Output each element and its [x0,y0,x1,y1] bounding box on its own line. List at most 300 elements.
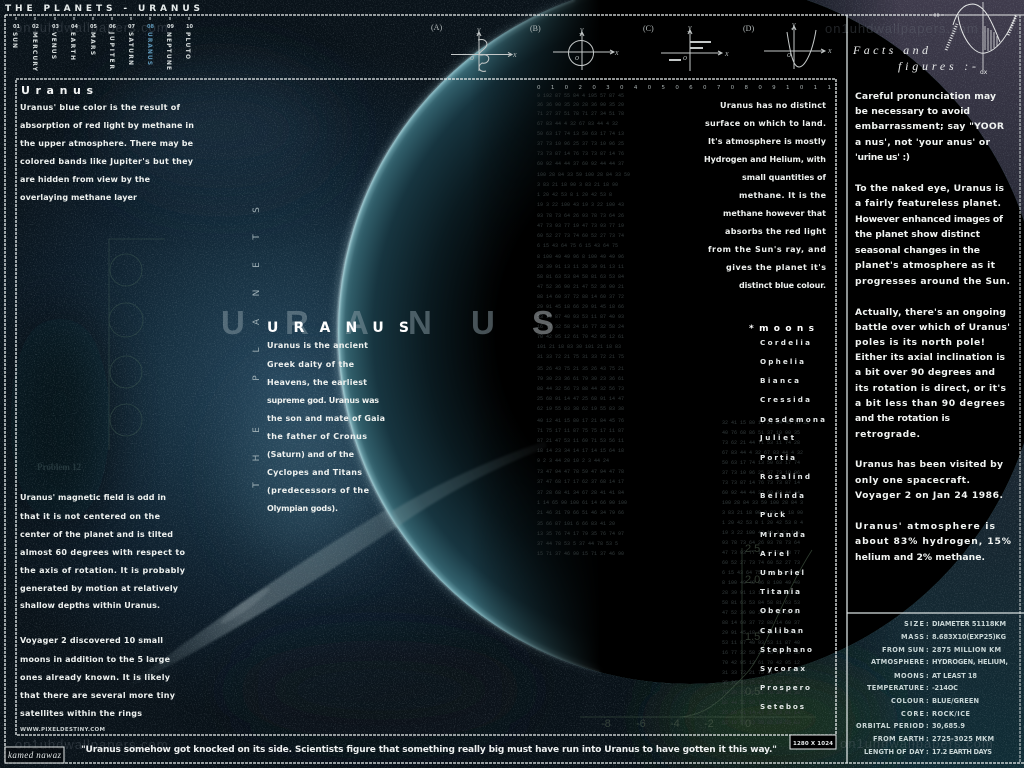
heading: Uranus: Uranus [21,84,93,97]
left text: blue colour: colored bands like Jupiter's but they [20,157,194,166]
facts text: naked eye: planet's atmosphere as it [855,260,996,271]
center heading: Uranus: URANUS [267,320,409,336]
number grid: 93 78 73 64 26 93 78 73 64 26 [537,213,624,219]
website credit: WWW.PIXELDESTINY.COM [20,727,105,733]
planet navigation: MARS [89,32,95,55]
planet navigation: 01 [13,24,20,30]
number grid: 16 77 32 58 24 16 77 32 58 24 [537,324,624,330]
number grid: 73 62 21 44 71 53 11 74 28 [722,440,800,446]
left text: blue colour: absorption of red light by methane in [20,121,194,130]
vertical heading: the planets: S [252,207,262,213]
facts text: naked eye [855,183,1010,287]
number grid: 87 21 47 53 11 60 71 53 56 11 [537,438,624,444]
number grid: 37 73 10 96 25 37 73 10 96 [722,470,800,476]
planet statistics table: ROCK/ICE [932,710,970,718]
planet statistics table: -214OC [932,684,958,692]
facts text: north pole: a bit over 90 degrees and [855,367,995,378]
facts text: north pole: and the rotation is [855,413,951,424]
planet statistics table: 2725-3025 MKM [932,735,994,743]
number grid: 70 42 95 12 61 70 42 95 12 61 [537,334,624,340]
vertical heading: the planets [252,207,262,489]
facts text: naked eye: To the naked eye, Uranus is [855,183,1005,194]
planet statistics table: : [926,684,929,692]
left text: moons discovered [20,636,176,718]
moons list: Juliet [759,433,795,442]
number grid: 71 75 17 11 87 75 75 17 11 87 [537,428,624,434]
moons heading: *moons [749,324,814,334]
facts text: pronunciation: a nus', not 'your anus' or [855,137,990,148]
center text: Greek deity: the son and mate of Gaia [267,414,385,423]
math figures A to D: y [791,20,796,29]
planet navigation: 10 [186,24,193,30]
big ghost heading: U [471,304,495,341]
center text: Greek deity: (Saturn) and of the [267,450,355,459]
facts and figures heading: figures :- [898,59,976,73]
number grid: 88 14 60 37 72 88 14 60 37 72 [537,294,624,300]
number grid: 35 26 43 75 21 35 26 43 75 [722,680,800,686]
facts text: north pole: its rotation is direct, or it's [855,383,1007,394]
moons list: Belinda [760,491,804,500]
big ghost heading: A [345,304,369,341]
faint bottom graph: -2 [704,718,714,730]
watermarks: on1uhdwallpapers.com [840,736,994,751]
number grid: 101 21 18 83 30 101 21 18 83 [537,344,621,350]
number grid: 79 30 23 36 61 79 30 23 36 [722,690,800,696]
math figures A to D: y [579,25,584,34]
vertical heading: the planets: P [252,375,262,381]
number grid: 100 28 84 33 59 100 28 84 3 [722,500,803,506]
number grid: 58 81 63 53 84 58 81 63 53 [722,600,800,606]
watermarks: on1uhdwallpapers.com [15,20,169,35]
planet navigation: 09 [167,24,174,30]
planet statistics table: 30,685.9 [932,722,965,730]
number grid: 1 20 42 53 8 1 20 42 53 8 [537,192,612,198]
right column text: atmosphere: small quantities of [742,173,827,182]
number grid: 88 44 32 56 73 88 44 32 56 [722,700,800,706]
planet navigation: 02 [32,24,39,30]
facts text: north pole: Actually, there's an ongoing [855,307,1006,318]
facts text: Voyager visit [855,459,1003,501]
title: THE PLANETS - URANUS [5,4,200,14]
left text: moons discovered: ones already known. It is likely [20,673,171,682]
left text: magnetic field: Uranus' magnetic field is odd in [20,493,166,502]
watermarks: on1uhdwallpapers.com [15,737,169,752]
number grid: 50 63 17 74 13 50 63 17 74 13 [537,131,624,137]
left text: moons discovered: Voyager 2 discovered 10 small [20,636,163,645]
vertical heading: the planets: H [252,455,262,461]
planet statistics table: : [926,646,929,654]
planet statistics table: FROM SUN [882,646,924,654]
vertical heading: the planets: L [252,347,262,353]
number grid: 9 2 3 44 20 10 2 3 44 24 [537,458,609,464]
number grid: 19 3 22 100 43 19 3 22 100 43 [537,202,624,208]
facts text: Voyager visit: Uranus has been visited by [855,459,1003,470]
number grid: 31 33 72 21 75 31 33 72 21 [722,670,800,676]
number grid: 35 26 43 75 21 35 26 43 75 21 [537,366,624,372]
moons list: Titania [760,587,800,596]
facts text: atmosphere composition: Uranus' atmosphere is [855,521,996,532]
planet navigation: URANUS [146,32,152,65]
number grid: 67 83 44 4 32 67 83 44 4 32 [722,450,803,456]
number grid: 37 47 68 17 17 62 37 68 14 17 [537,479,624,485]
number grid: 40 12 41 15 80 17 21 84 45 76 [537,418,624,424]
faint bottom graph: 0.5 [745,686,760,698]
facts text: naked eye: a fairly featureless planet. [855,198,1001,209]
left text: magnetic field: that it is not centered on the [20,512,161,521]
number grid: 6 15 43 64 75 6 15 43 64 75 [722,570,803,576]
facts text: pronunciation: Careful pronunciation may [855,91,996,102]
number grid: 29 91 45 18 66 29 91 45 18 [722,630,800,636]
planet statistics table: COLOUR [891,697,924,705]
math figures A to D: (B) [530,24,541,33]
number grid: 6 15 43 64 75 6 15 43 64 75 [537,243,618,249]
planet statistics table: DIAMETER 51118KM [932,620,1006,628]
number grid header: 0 1 0 2 0 3 0 4 0 5 0 6 0 7 0 8 0 9 1 0 1 1 [537,85,831,91]
vertical heading: the planets: T [252,234,262,241]
number grid: 47 73 93 77 19 47 73 93 77 19 [537,223,624,229]
planet statistics table: 2875 MILLION KM [932,646,1001,654]
facts text: pronunciation: embarrassment; say "YOOR [855,121,1004,132]
number grid: 37 28 68 41 34 67 28 41 41 84 [537,490,624,496]
vertical heading: the planets: T [252,482,262,489]
number grid: 21 46 31 79 66 51 46 34 79 66 [537,510,624,516]
resolution box [790,735,836,749]
moons list [759,338,825,711]
number grid: 36 36 90 35 20 28 36 90 35 20 [537,102,624,108]
facts text: north pole: poles is its north pole! [855,337,985,348]
math figures A to D: y [687,23,692,32]
number grid: 60 52 27 73 74 60 52 27 73 74 [537,233,624,239]
moons list: Stephano [760,645,812,654]
right column text: atmosphere: methane however that [723,209,826,218]
facts text: atmosphere composition: helium and 2% methane. [855,552,985,563]
signature box: kamed nawaz [8,750,61,760]
number grid: 79 30 23 36 61 79 30 23 36 61 [537,376,624,382]
planet statistics table: : [926,672,929,680]
facts text: north pole: retrograde. [855,429,920,440]
planet navigation: SATURN [127,32,133,65]
planet navigation: 08 [147,24,154,30]
planet statistics table: SIZE [904,620,924,628]
center text: Greek deity: Olympian gods). [267,504,338,513]
center text: Greek deity: the father of Cronus [267,432,367,441]
planet navigation: 04 [71,24,78,30]
planet navigation: SUN [11,32,17,48]
faint bottom graph: 0 [745,718,751,730]
number grid: 8 100 49 49 96 8 100 49 49 [722,580,800,586]
math figures A to D: o [470,53,474,62]
facts text: pronunciation: be necessary to avoid [855,106,970,117]
math figures A to D: (D) [743,24,754,33]
planet navigation: JUPITER [108,31,114,70]
left text: magnetic field: generated by motion at relatively [20,584,179,593]
planet navigation: MERCURY [31,32,37,72]
planet statistics table: : [926,735,929,743]
planet statistics table: MOONS [894,672,924,680]
number grid: 47 52 36 90 21 47 52 36 90 [722,610,800,616]
number grid: 50 63 17 74 13 50 63 17 74 [722,460,800,466]
planet statistics table: ATMOSPHERE [871,658,924,666]
planet statistics table: : [926,748,929,756]
right column text: atmosphere: methane. It is the [739,191,827,200]
number grid: 1 14 65 90 100 61 14 66 90 100 [537,500,627,506]
planet statistics table: : [926,697,929,705]
number grid: 28 39 91 13 11 28 39 91 13 [722,590,800,596]
left text: blue colour: the upper atmosphere. There may be [20,139,194,148]
center text: Greek deity: (predecessors of the [267,486,370,495]
number grid: 60 52 27 73 74 60 52 27 73 [722,560,800,566]
center text: Greek deity: Heavens, the earliest [267,378,367,387]
vertical heading: the planets: A [252,318,262,325]
left text: blue colour [20,103,194,202]
number grid: 60 92 44 44 37 60 92 44 44 [722,490,800,496]
moons list: Bianca [760,376,799,385]
facts text: atmosphere composition: about 83% hydrogen, 15% [855,536,1011,547]
planet statistics table: HYDROGEN, HELIUM, [932,658,1008,666]
left text: magnetic field [20,493,186,610]
facts text: north pole: a bit less than 90 degrees [855,398,1006,409]
right column text: atmosphere: Uranus has no distinct [720,101,826,110]
left text: magnetic field: center of the planet and is tilted [20,530,173,539]
planet navigation [11,17,193,72]
number grid: 25 68 91 14 47 25 68 91 14 47 [537,396,624,402]
math figures A to D: x [724,49,729,58]
planet Uranus [338,0,1024,700]
planet statistics table: FROM EARTH [873,735,924,743]
planet statistics table: : [926,633,929,641]
planet navigation: EARTH [69,32,75,60]
planet navigation: 06 [109,24,116,30]
moons list: Puck [760,510,785,519]
math figures A to D: o [575,53,579,62]
math figures A to D: (C) [643,24,654,33]
moons list: Cordelia [760,338,810,347]
planet navigation: 03 [52,24,59,30]
center text: Greek deity: Greek daity of the [267,360,355,369]
left text: moons discovered: that there are several more tiny [20,691,176,700]
number grid: 62 19 55 83 38 62 19 55 83 38 [537,406,624,412]
planet statistics table: CORE [901,710,924,718]
faint bottom graph: -4 [670,718,680,730]
number grid: 73 73 87 14 76 73 73 87 14 76 [537,151,624,157]
facts text: atmosphere composition [855,521,1011,563]
number grid: 37 44 78 53 5 37 44 78 53 5 [537,541,618,547]
moons list: Miranda [760,530,805,539]
moons list: Cressida [760,395,810,404]
vertical heading: the planets: E [252,262,262,268]
facts text: naked eye: progresses around the Sun. [855,276,1010,287]
top right graph sketch: dx [980,69,988,76]
number grid: 73 47 94 47 78 59 47 94 47 78 [537,469,624,475]
planet statistics table: ORBITAL PERIOD [856,722,925,730]
planet navigation: 05 [90,24,97,30]
planet statistics table [856,620,1008,756]
planet statistics table: 8.683X10(EXP25)KG [932,633,1006,641]
number grid: 47 52 36 90 21 47 52 36 90 21 [537,284,624,290]
faint bottom graph: 2.5 [745,543,760,555]
left text: magnetic field: the axis of rotation. It is probably [20,566,186,575]
facts text: naked eye: However enhanced images of [855,214,1004,225]
left text: blue colour: Uranus' blue color is the result of [20,103,181,112]
right column text: atmosphere: from the Sun's ray, and [708,245,826,254]
facts text: Voyager visit: Voyager 2 on Jan 24 1986. [855,490,1003,501]
number grid: 8 100 49 49 96 8 100 49 49 96 [537,254,624,260]
planet navigation: PLUTO [184,32,190,59]
facts and figures heading [852,43,976,73]
planet statistics table: MASS [901,633,924,641]
moons list: Setebos [760,702,804,711]
vertical heading: the planets: E [252,427,262,433]
facts text: north pole: Either its axial inclination is [855,352,1006,363]
number grid: 40 76 68 86 51 37 10 90 35 [722,430,800,436]
number grid: 67 83 44 4 32 67 83 44 4 32 [537,121,618,127]
facts text: north pole: battle over which of Uranus' [855,322,1010,333]
moons list: Ariel [760,549,789,558]
big ghost heading: U [221,304,245,341]
moons list: Sycorax [760,664,805,673]
number grid: 29 91 45 18 66 29 91 45 18 66 [537,304,624,310]
number grid: 1 20 42 53 8 1 20 42 53 8 4 [722,520,803,526]
left text: blue colour: overlaying methane layer [20,193,137,202]
facts text: pronunciation: 'urine us' :) [855,152,910,163]
vertical heading: the planets: N [252,290,262,296]
resolution box: 1280 X 1024 [793,741,833,747]
number grid: 32 41 15 80 17 21 84 45 76 33 [722,420,809,426]
number grid: 35 66 87 101 6 66 83 41 20 [537,521,615,527]
number grid: 37 73 10 96 25 37 73 10 96 25 [537,141,624,147]
moons list: Desdemona [760,415,825,424]
ring segment in front of the planet [392,441,547,528]
faint bottom graph: -8 [601,718,611,730]
number grid: 100 28 84 33 59 100 28 84 33 59 [537,172,630,178]
planet navigation: 07 [128,24,135,30]
big ghost heading [221,304,554,341]
right column text: atmosphere: gives the planet it's [726,263,826,272]
number grid: 31 33 72 21 75 31 33 72 21 75 [537,354,624,360]
moons list: Rosalind [760,472,810,481]
number grid: 19 3 22 100 43 19 3 22 100 [722,530,800,536]
center text: Greek deity [267,341,385,513]
number grid: 58 81 63 53 84 58 81 63 53 84 [537,274,624,280]
number grid: 9 192 87 55 84 4 195 57 87 45 [537,93,624,99]
facts text: Voyager visit: only one spacecraft. [855,475,970,486]
facts and figures heading: Facts and [852,43,929,57]
planet navigation: VENUS [50,32,56,59]
number grid: 47 73 93 77 19 47 73 93 77 [722,550,800,556]
number grid: 93 78 73 64 26 93 78 73 64 [722,540,800,546]
faint bottom graph: 1.5 [745,631,760,643]
math figures A to D: y [476,25,481,34]
center text: Greek deity: Cyclopes and Titans [267,468,362,477]
facts text: naked eye: the planet show distinct [855,229,981,240]
number grid: 88 44 32 56 73 88 44 32 56 73 [537,386,624,392]
number grid: 70 42 95 12 61 70 42 95 12 [722,660,800,666]
moons list: Oberon [760,606,800,615]
planet statistics table: : [926,722,929,730]
planet statistics table: : [926,658,929,666]
big ghost heading: S [532,304,554,341]
quote: "Uranus somehow got knocked on its side. Scientists figure that something really big must have run into Uranus to have gotten it this way." [81,745,777,755]
left text: magnetic field: almost 60 degrees with respect to [20,548,186,557]
faint diagram in the background: Problem 12 [37,462,82,472]
number grid [537,93,809,726]
math figures A to D: (A) [431,23,442,32]
moons list: Umbriel [760,568,804,577]
number grid: 28 39 91 13 11 28 39 91 13 11 [537,264,624,270]
center text: Greek deity: Uranus is the ancient [267,341,368,350]
left text: magnetic field: shallow depths within Uranus. [20,601,160,610]
number grid: 3 83 21 18 90 3 83 21 18 90 [722,510,803,516]
big ghost heading: R [285,304,309,341]
math figures A to D: x [827,46,832,55]
facts text: naked eye: seasonal changes in the [855,245,980,256]
math figures A to D: o [787,50,791,59]
planet statistics table: LENGTH OF DAY [864,748,924,756]
top right graph sketch [930,2,1024,76]
faint bottom graph: 2.0 [745,574,760,586]
signature box [5,747,64,763]
facts text: north pole [855,307,1010,440]
math figures A to D: x [512,50,517,59]
planet navigation: NEPTUNE [165,32,171,70]
number grid: 88 14 60 37 72 88 14 60 37 [722,620,800,626]
number grid: 53 11 87 40 93 53 11 87 40 93 [537,314,624,320]
number grid: 60 92 44 44 37 60 92 44 44 37 [537,161,624,167]
moons list: Prospero [760,683,810,692]
facts text: pronunciation [855,91,1004,163]
left text: moons discovered: satellites within the rings [20,709,142,718]
math figures A to D: o [683,53,687,62]
number grid: 53 11 87 40 93 53 11 87 40 [722,640,800,646]
number grid: 73 73 87 14 76 73 73 87 14 [722,480,800,486]
number grid: 25 68 91 14 47 25 68 91 14 [722,710,800,716]
number grid: 13 35 76 74 17 79 35 76 74 97 [537,531,624,537]
right column text: atmosphere: distinct blue colour. [739,281,826,290]
faint bottom graph [580,543,816,730]
right column text: atmosphere [704,101,827,290]
planet statistics table: TEMPERATURE [867,684,924,692]
right column text: atmosphere: surface on which to land. [705,119,826,128]
watermarks: on1uhdwallpapers.com [825,21,979,36]
planet statistics table: : [926,710,929,718]
faint bottom graph: -6 [636,718,646,730]
number grid: 71 27 37 51 78 71 27 34 51 78 [537,111,624,117]
left text: blue colour: are hidden from view by the [20,175,151,184]
planet statistics table: : [926,620,929,628]
number grid: 18 14 23 34 14 17 14 15 64 18 [537,448,624,454]
number grid: 62 19 55 83 38 62 19 55 83 [722,720,800,726]
right column text: atmosphere: It's atmosphere is mostly [708,137,827,146]
planet statistics table: AT LEAST 18 [932,672,977,680]
planet statistics table: BLUE/GREEN [932,697,979,705]
moons list: Ophelia [760,357,804,366]
number grid: 3 83 21 18 90 3 83 21 18 90 [537,182,618,188]
number grid: 16 77 32 58 24 16 77 32 58 [722,650,800,656]
big ghost heading: N [408,304,432,341]
center text: Greek deity: supreme god. Uranus was [267,396,379,405]
moons list: Portia [760,453,795,462]
math figures A to D: x [614,48,619,57]
moons list: Caliban [760,626,803,635]
ring of Uranus [120,441,547,692]
left text: moons discovered: moons in addition to the 5 large [20,655,171,664]
faint diagram in the background [37,239,165,472]
number grid: 15 71 37 46 90 15 71 37 46 90 [537,551,624,557]
right column text: atmosphere: absorbs the red light [725,227,826,236]
right column text: atmosphere: Hydrogen and Helium, with [704,155,826,164]
planet statistics table: 17.2 EARTH DAYS [932,748,992,756]
math figures A to D [431,20,832,71]
